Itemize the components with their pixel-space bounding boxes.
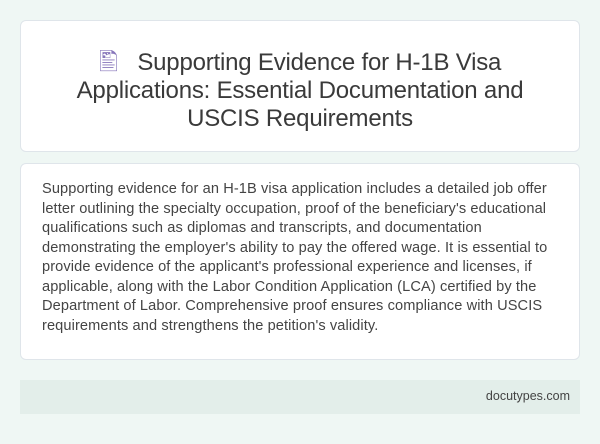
footer — [20, 380, 580, 414]
footer: docutypes.com — [486, 389, 570, 403]
title: 🖺 Supporting Evidence for H-1B Visa Applications: Essential Documentation and USCIS Requirements — [77, 49, 523, 132]
text block: Supporting evidence for an H-1B visa application includes a detailed job offer letter outlining the specialty occupation, proof of the beneficiary's educational qualifications such as diplomas and transcripts, and documentation demonstrating the employer's ability to pay the offered wage. It is essential to provide evidence of the applicant's professional experience and licenses, if applicable, along with the Labor Condition Application (LCA) certified by the Department of Labor. Comprehensive proof ensures compliance with USCIS requirements and strengthens the petition's validity. — [42, 181, 547, 334]
header panel — [20, 20, 580, 152]
panel: description — [20, 163, 580, 360]
